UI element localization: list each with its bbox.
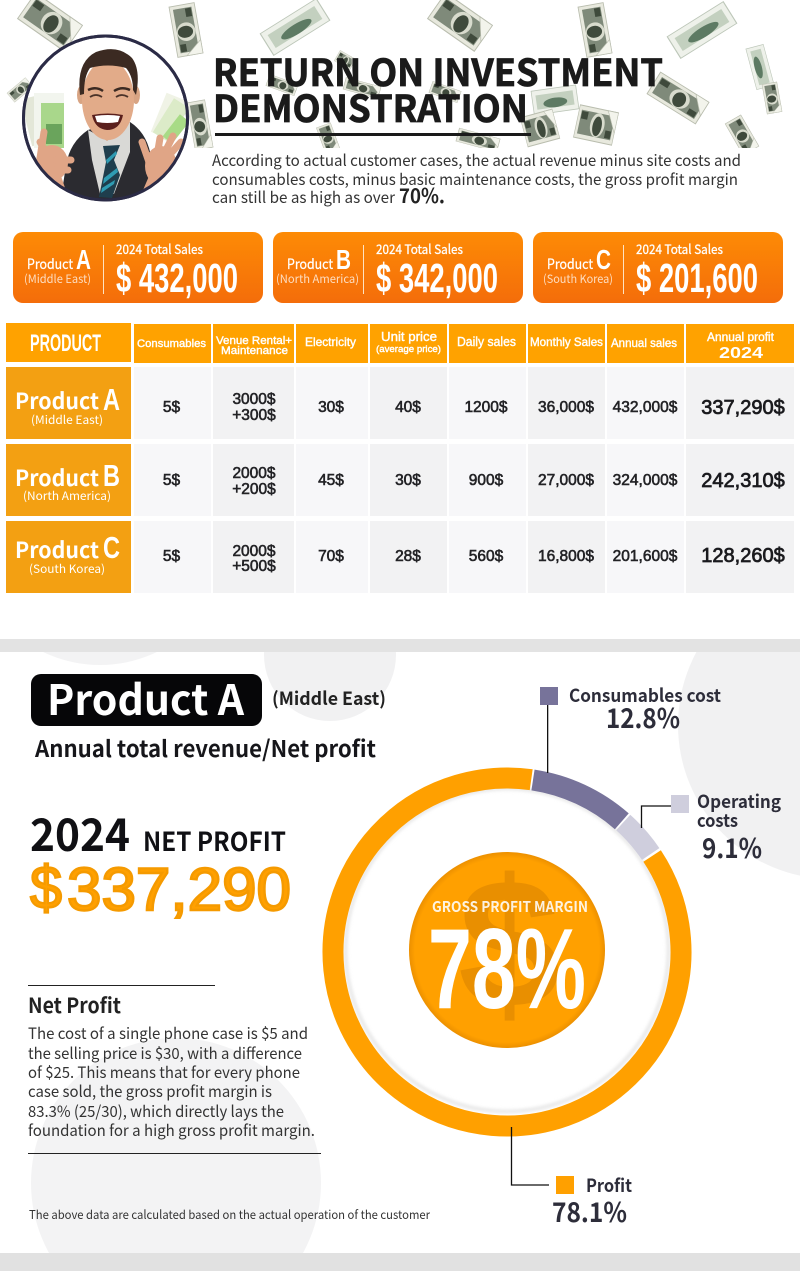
table header row: 2024 <box>719 345 763 362</box>
eyes and brows <box>88 88 130 91</box>
region label: (Middle East) <box>272 685 386 711</box>
net profit figure: $ <box>30 854 62 921</box>
title: RETURN ON INVESTMENT <box>213 43 663 97</box>
table row: Product B: (North America) <box>23 488 111 504</box>
table header row: Venue Rental+ <box>216 335 292 347</box>
net profit explanation: 83.3% (25/30), which directly lays the <box>28 1100 284 1122</box>
table row: Product B <box>6 444 794 516</box>
sales card: Product A: Product <box>27 254 74 274</box>
table row: Product B: 45$ <box>318 472 344 489</box>
ears <box>77 86 82 104</box>
sales card: Product A <box>13 232 263 303</box>
table row: Product C: 16,800$ <box>538 548 594 565</box>
table header row: Electricity <box>305 335 356 349</box>
title <box>213 43 663 136</box>
legend: profit <box>512 1127 632 1230</box>
shirt <box>88 122 130 194</box>
heading: Product A pill: Product A <box>47 667 245 728</box>
net profit figure: 2024 <box>30 799 130 864</box>
table row: Product C: (South Korea) <box>29 561 105 577</box>
table row: Product A: 40$ <box>395 399 421 416</box>
legend: consumables cost: Consumables cost <box>569 682 721 708</box>
table row: Product C: C <box>103 530 120 565</box>
suit <box>63 122 150 198</box>
segment: consumables cost <box>533 780 622 821</box>
subheading: Annual total revenue/Net profit <box>34 730 376 764</box>
net profit explanation: foundation for a high gross profit margin. <box>28 1119 315 1141</box>
tie <box>99 145 120 198</box>
net profit explanation: of $25. This means that for every phone <box>28 1061 300 1083</box>
table row: Product C: Product <box>15 533 99 565</box>
sales card: Product C: 2024 Total Sales <box>636 239 723 258</box>
legend: profit: 78.1% <box>552 1191 627 1230</box>
center coin: gross profit margin <box>409 840 605 1048</box>
net profit explanation <box>28 985 321 1154</box>
table row: Product C: 2000$ <box>232 543 276 560</box>
center coin: gross profit margin: 78% <box>428 906 586 1033</box>
center coin: gross profit margin: GROSS PROFIT MARGIN <box>432 896 588 917</box>
table row: Product B: 242,310$ <box>701 470 785 492</box>
table header row: Annual sales <box>611 336 677 350</box>
sales card: Product B: Product <box>287 254 334 274</box>
sales card: Product C: Product <box>547 254 594 274</box>
intro text block: consumables costs, minus basic maintenance costs, the gross profit margin <box>212 168 738 190</box>
sales card: Product A: $ 432,000 <box>116 255 238 301</box>
table row: Product A <box>6 367 794 439</box>
center coin: gross profit margin: $ <box>458 840 560 1046</box>
segment: operating costs <box>623 822 651 854</box>
net profit figure: NET PROFIT <box>143 822 286 859</box>
sales card: Product C <box>533 232 783 303</box>
sales card: Product B: $ 342,000 <box>376 255 498 301</box>
table header row <box>6 323 794 363</box>
table row: Product B: 27,000$ <box>538 472 594 489</box>
table header row: PRODUCT <box>30 330 101 357</box>
sales card: Product B <box>273 232 523 303</box>
face <box>82 60 134 140</box>
legend: operating costs: Operating <box>697 788 781 814</box>
table row: Product C <box>6 521 794 593</box>
table row: Product A: 432,000$ <box>613 399 678 416</box>
legend: consumables cost: 12.8% <box>606 697 680 736</box>
intro text block: According to actual customer cases, the actual revenue minus site costs and <box>212 149 741 171</box>
icon: money fan left <box>25 93 64 148</box>
net profit figure: 337,290 <box>67 856 291 923</box>
legend: operating costs: costs <box>697 807 738 833</box>
donut chart <box>333 778 681 1126</box>
table row: Product A: 1200$ <box>464 399 508 416</box>
table row: Product A: 36,000$ <box>538 399 594 416</box>
table row: Product A: (Middle East) <box>31 412 103 428</box>
portrait: smiling businessman holding money <box>21 36 189 205</box>
footnote: The above data are calculated based on the actual operation of the customer <box>29 1206 430 1223</box>
right hand <box>142 136 181 192</box>
table row: Product A: 337,290$ <box>701 397 785 419</box>
table row: Product B: 900$ <box>469 472 504 489</box>
section background circles and bands <box>0 639 800 1271</box>
legend: profit: Profit <box>586 1172 632 1198</box>
table row: Product C: 5$ <box>163 548 180 565</box>
table row: Product C: 70$ <box>318 548 344 565</box>
mouth <box>92 114 123 130</box>
table row: Product A: A <box>103 382 120 417</box>
sales card: Product C: C <box>596 244 611 275</box>
intro text block: 70%. <box>399 180 445 209</box>
intro text block <box>212 149 741 209</box>
table row: Product B: 5$ <box>163 472 180 489</box>
table row: Product C: 201,600$ <box>613 548 678 565</box>
table row: Product B: Product <box>15 461 99 493</box>
table row: Product B: 30$ <box>395 472 421 489</box>
table row: Product B: 324,000$ <box>613 472 678 489</box>
hair <box>79 49 138 95</box>
segment: profit <box>333 778 681 1126</box>
sales card: Product B: 2024 Total Sales <box>376 239 463 258</box>
table row: Product B: 2000$ <box>232 465 276 482</box>
icon: money fan right <box>151 93 186 141</box>
table header row: Unit price <box>381 329 437 344</box>
sales card: Product A: (Middle East) <box>24 271 91 287</box>
table row: Product A: Product <box>15 384 99 416</box>
net profit explanation: The cost of a single phone case is $5 and <box>28 1022 308 1044</box>
neck <box>105 140 108 141</box>
table header row: Annual profit <box>707 332 775 344</box>
table row: Product A: +300$ <box>232 407 276 424</box>
net profit figure <box>30 799 291 923</box>
header banner: falling money bills <box>7 0 782 155</box>
table header row: Maintenance <box>221 345 288 357</box>
table header row: Monthly Sales <box>530 335 603 349</box>
sales card: Product B: (North America) <box>276 271 359 287</box>
table row: Product C: +500$ <box>232 558 276 575</box>
net profit explanation: Net Profit <box>28 990 121 1020</box>
sales card: Product A: 2024 Total Sales <box>116 239 203 258</box>
intro text block: can still be as high as over <box>212 186 396 208</box>
sales card: Product C: (South Korea) <box>543 271 613 287</box>
sales card: Product B: B <box>336 244 351 275</box>
left hand <box>36 132 71 196</box>
table row: Product B: B <box>103 458 120 493</box>
legend: operating costs <box>642 788 781 866</box>
sales card: Product A: A <box>76 244 91 275</box>
table header row: (average price) <box>376 344 441 355</box>
title: DEMONSTRATION <box>213 79 528 133</box>
table row: Product C: 28$ <box>395 548 421 565</box>
table row: Product C: 128,260$ <box>701 545 785 567</box>
table row: Product A: 30$ <box>318 399 344 416</box>
table header row: Daily sales <box>457 334 516 349</box>
table row: Product A: 3000$ <box>232 391 276 408</box>
table row: Product C: 560$ <box>469 548 504 565</box>
net profit explanation: the selling price is $30, with a difference <box>28 1042 302 1064</box>
legend: consumables cost <box>540 682 721 773</box>
table row: Product A: 5$ <box>163 399 180 416</box>
table row: Product B: +200$ <box>232 481 276 498</box>
legend: operating costs: 9.1% <box>702 827 762 866</box>
table header row: Consumables <box>137 338 207 350</box>
net profit explanation: case sold, the gross profit margin is <box>28 1080 272 1102</box>
